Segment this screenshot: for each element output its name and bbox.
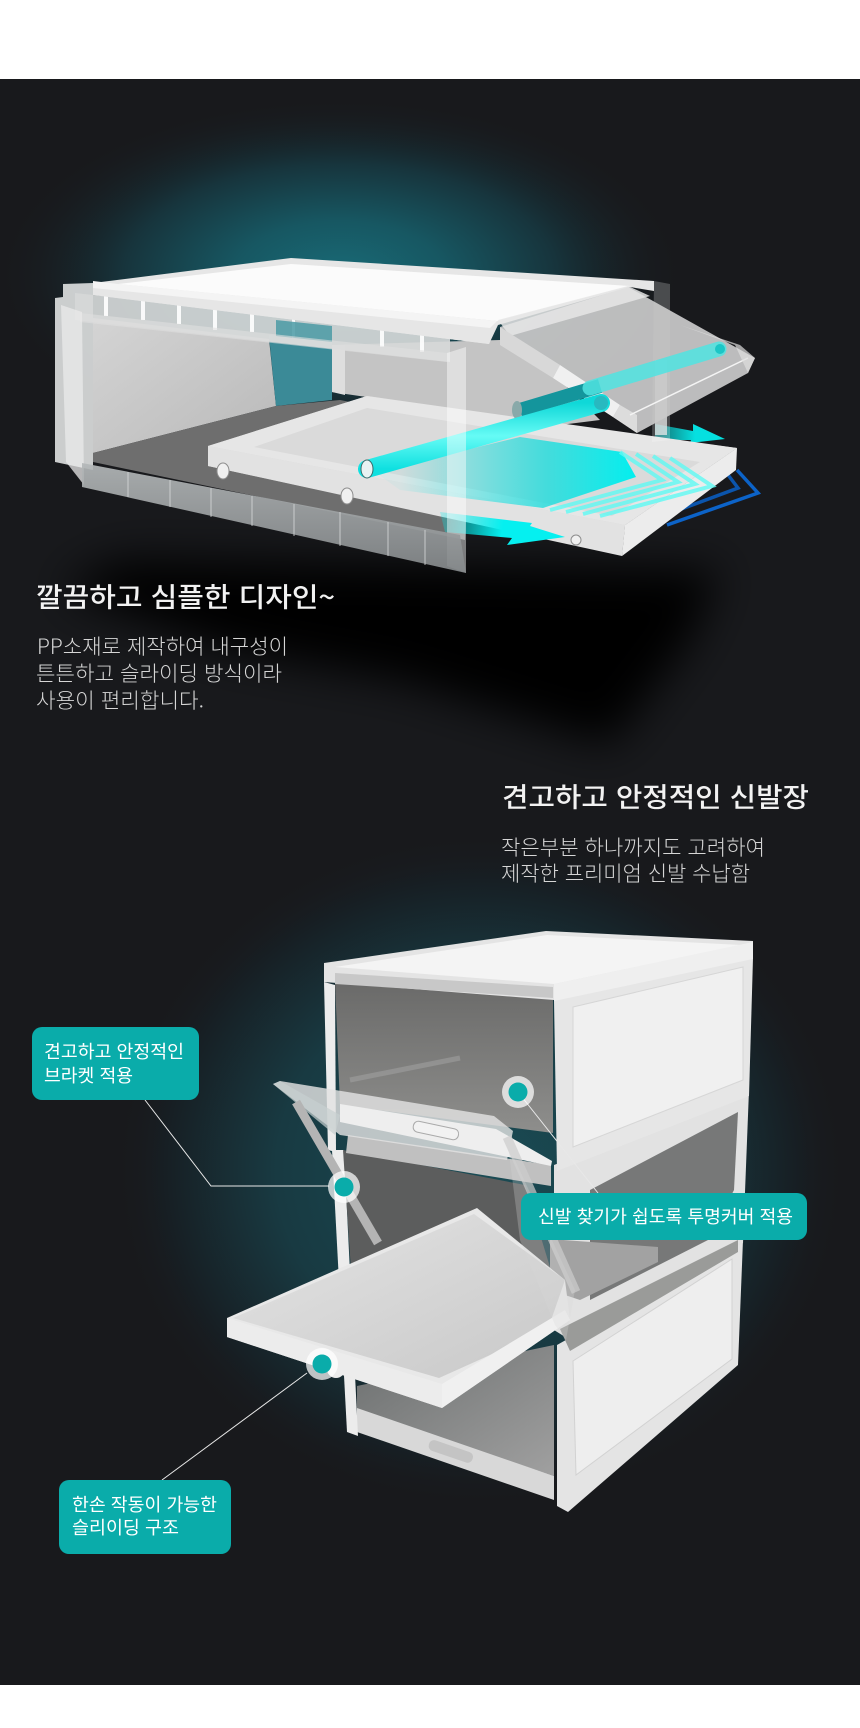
tray knobs (217, 463, 581, 545)
bottom product: stacked cabinets (227, 931, 753, 1512)
back wall slot strip (75, 293, 450, 362)
bottom unit front glass (357, 1345, 554, 1476)
top product: open shoe box (55, 258, 758, 573)
body text: clean design (36, 631, 288, 715)
tray chevron stripes (550, 452, 712, 516)
left posts (332, 1150, 358, 1436)
open flap (273, 1081, 552, 1166)
shelf (227, 1208, 570, 1408)
right bracket (507, 1137, 576, 1292)
callout: bracket (32, 1027, 199, 1100)
top lid (324, 931, 753, 1000)
teal glow behind bottom product (60, 830, 860, 1510)
left interior wall (93, 318, 276, 453)
floor shadow under top product (60, 560, 720, 745)
teal opening in back wall (269, 335, 332, 406)
callout: sliding structure: 슬리이딩 구조 (72, 1514, 179, 1540)
bottom unit drawer strip (357, 1408, 554, 1500)
open flap door (498, 286, 755, 433)
back cyan tube (512, 344, 725, 419)
heading: clean design: 깔끔하고 심플한 디자인~ (36, 576, 335, 615)
callout: bracket: 견고하고 안정적인 (44, 1038, 184, 1064)
body text: clean design: PP소재로 제작하여 내구성이 (37, 631, 288, 661)
middle unit side (554, 1090, 749, 1340)
floor (93, 400, 470, 540)
upper cyan arrow (655, 424, 725, 443)
blue chevrons (660, 467, 758, 525)
callout: transparent cover (521, 1193, 807, 1240)
left bracket (296, 1102, 378, 1243)
back right frame post (652, 281, 670, 442)
top unit front glass (335, 982, 553, 1133)
hotspot: bracket (328, 1171, 360, 1203)
glass door panel (508, 1145, 575, 1340)
silver hinge bar (346, 1135, 551, 1186)
body text: sturdy shoe rack: 작은부분 하나까지도 고려하여 (501, 832, 765, 862)
body text: sturdy shoe rack (501, 832, 765, 888)
hotspot: sliding structure (306, 1348, 338, 1380)
top unit side (554, 958, 753, 1171)
bottom unit side (557, 1240, 743, 1512)
sliding knob (327, 1360, 345, 1378)
hotspot: transparent cover (502, 1076, 534, 1108)
inner transparent box (550, 1239, 658, 1300)
body text: sturdy shoe rack: 제작한 프리미엄 신발 수납함 (501, 858, 750, 888)
callout: bracket: 브라켓 적용 (44, 1062, 133, 1088)
callout: sliding structure: 한손 작동이 가능한 (72, 1491, 217, 1517)
callout leader lines (145, 1092, 598, 1480)
lid (93, 258, 654, 344)
heading: sturdy shoe rack: 견고하고 안정적인 신발장 (502, 776, 809, 815)
middle unit opening (343, 1150, 560, 1300)
body text: clean design: 사용이 편리합니다. (36, 685, 204, 715)
callout: sliding structure (59, 1480, 231, 1554)
tray (208, 396, 737, 555)
transparent front frame (61, 305, 466, 573)
tray highlight floor (375, 437, 636, 508)
lower cyan arrow (440, 512, 565, 545)
callout: transparent cover: 신발 찾기가 쉽도록 투명커버 적용 (538, 1203, 793, 1229)
front cyan tube (361, 396, 608, 478)
back left frame (55, 283, 93, 470)
body text: clean design: 튼튼하고 슬라이딩 방식이라 (36, 658, 282, 688)
right interior wall (332, 340, 600, 425)
teal glow behind top product (0, 79, 860, 549)
